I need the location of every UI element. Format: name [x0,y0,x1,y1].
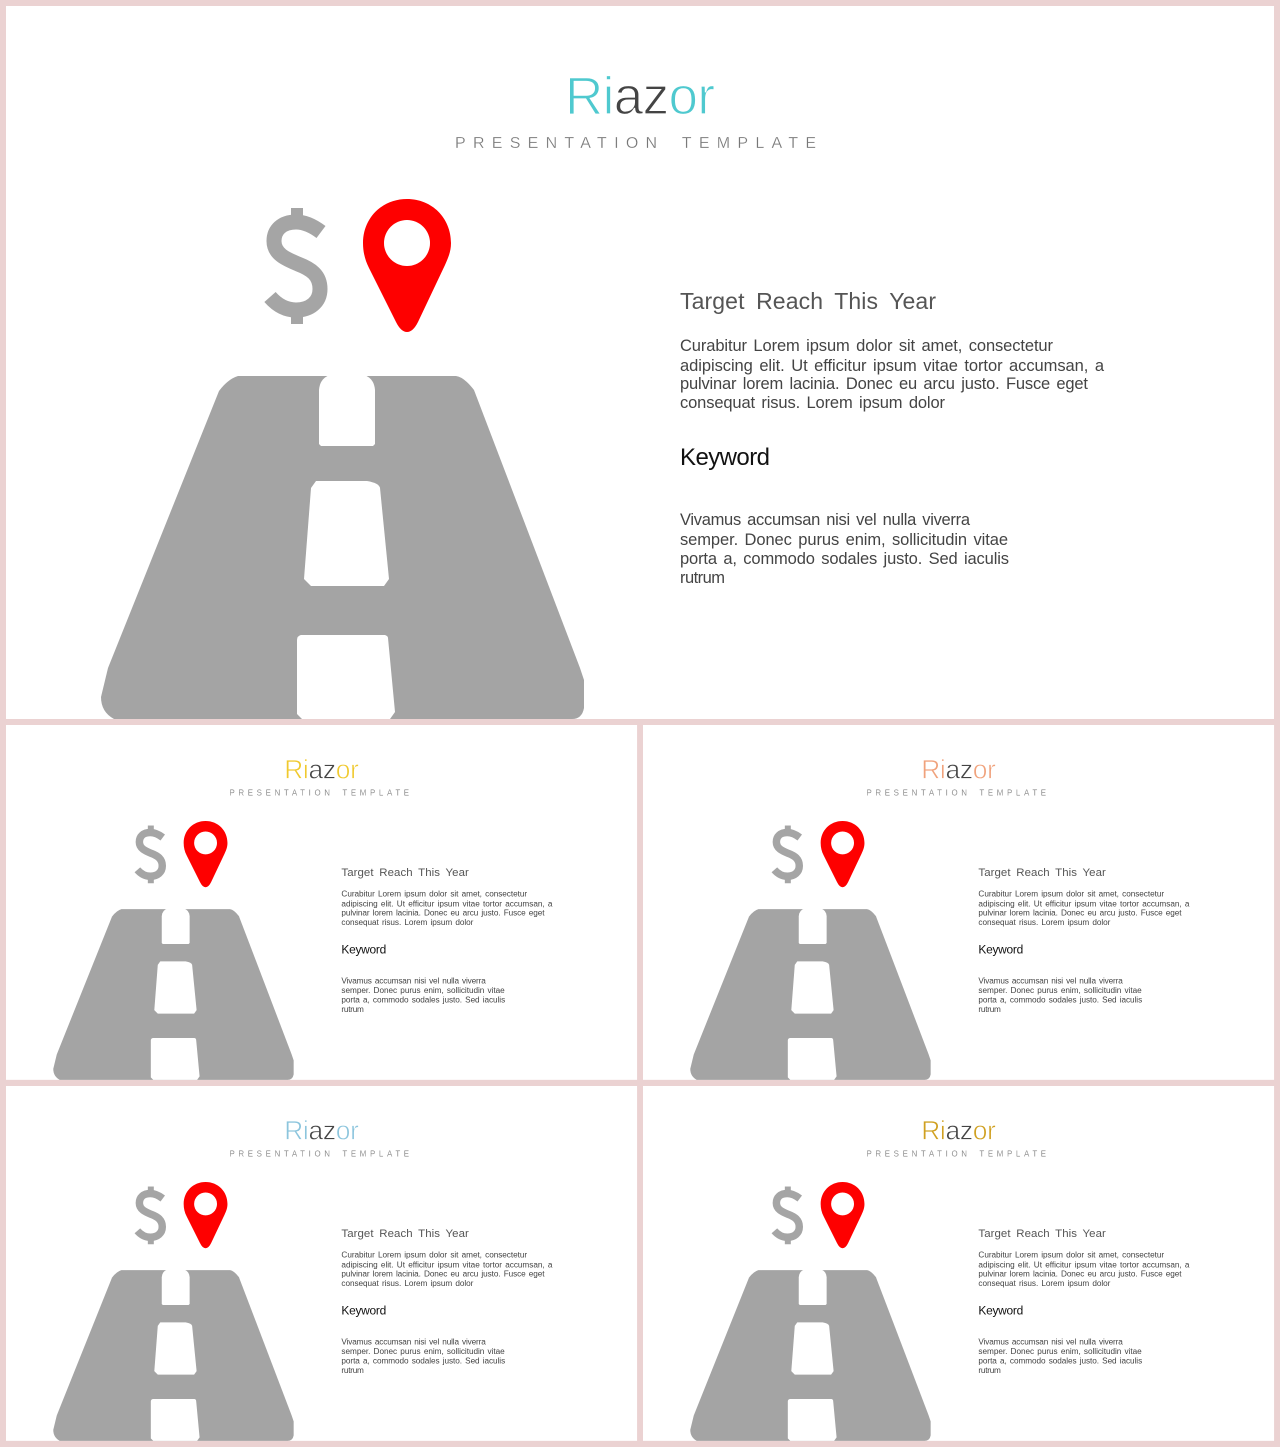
heading: target reach: Target Reach This Year [978,867,1106,879]
heading: keyword: Keyword [341,1303,386,1317]
text block: second paragraph: Vivamus accumsan nisi vel nulla viverra [978,976,1123,985]
text block: second paragraph: Vivamus accumsan nisi vel nulla viverra [978,1337,1123,1346]
text block: second paragraph: semper. Donec purus enim, sollicitudin vitae [978,1347,1142,1356]
subtitle: PRESENTATION TEMPLATE [866,1150,1046,1159]
text block: first paragraph: pulvinar lorem lacinia. Donec eu arcu justo. Fusce eget [978,1270,1182,1279]
icon: map pin [184,1182,227,1248]
text block: first paragraph: pulvinar lorem lacinia. Donec eu arcu justo. Fusce eget [680,375,1088,393]
icon: road [101,375,584,719]
icon: map pin [821,1182,864,1248]
heading: keyword: Keyword [978,1303,1023,1317]
text block: second paragraph: Vivamus accumsan nisi vel nulla viverra [680,511,971,529]
text block: second paragraph: porta a, commodo sodales justo. Sed iaculis [341,996,505,1005]
text block: first paragraph: Curabitur Lorem ipsum dolor sit amet, consectetur [680,337,1054,355]
title: Riazor [921,1116,996,1146]
text block: second paragraph [978,1337,1142,1375]
text block: first paragraph: adipiscing elit. Ut efficitur ipsum vitae tortor accumsan, a [978,900,1190,909]
title: Riazor [921,755,996,785]
subtitle: PRESENTATION TEMPLATE [229,1150,409,1159]
heading: keyword: Keyword [341,942,386,956]
text block: first paragraph: Curabitur Lorem ipsum dolor sit amet, consectetur [341,890,527,899]
subtitle: PRESENTATION TEMPLATE [229,789,409,798]
text block: first paragraph [341,1251,553,1288]
heading: target reach: Target Reach This Year [341,1228,469,1240]
text block: second paragraph: semper. Donec purus enim, sollicitudin vitae [341,986,505,995]
heading: target reach: Target Reach This Year [680,288,936,314]
icon: dollar sign [774,1187,800,1244]
text block: second paragraph [341,1337,505,1375]
text block: first paragraph: Curabitur Lorem ipsum dolor sit amet, consectetur [978,1251,1164,1260]
text block: second paragraph [680,511,1009,587]
text block: first paragraph: consequat risus. Lorem ipsum dolor [680,394,946,412]
text block: second paragraph: porta a, commodo sodales justo. Sed iaculis [978,996,1142,1005]
panel: blue slide [6,1086,637,1441]
text block: first paragraph: adipiscing elit. Ut efficitur ipsum vitae tortor accumsan, a [341,1261,553,1270]
panel: main slide [6,6,1274,719]
title: Riazor [284,755,359,785]
heading: keyword: Keyword [680,444,770,471]
text block: first paragraph: pulvinar lorem lacinia. Donec eu arcu justo. Fusce eget [341,1270,545,1279]
text block: second paragraph: Vivamus accumsan nisi vel nulla viverra [341,976,486,985]
text block: second paragraph: rutrum [978,1366,1001,1375]
title: Riazor [565,67,715,126]
heading: keyword: Keyword [978,942,1023,956]
icon: road [53,1270,294,1441]
title: Riazor [284,1116,359,1146]
text block: first paragraph: Curabitur Lorem ipsum dolor sit amet, consectetur [978,890,1164,899]
icon: dollar sign [137,826,163,883]
text block: second paragraph: rutrum [341,1366,364,1375]
text block: second paragraph: porta a, commodo sodales justo. Sed iaculis [341,1357,505,1366]
panel: orange slide [643,725,1274,1080]
text block: second paragraph: rutrum [341,1005,364,1014]
text block: first paragraph: adipiscing elit. Ut efficitur ipsum vitae tortor accumsan, a [341,900,553,909]
heading: target reach: Target Reach This Year [341,867,469,879]
text block: first paragraph: consequat risus. Lorem ipsum dolor [341,918,474,927]
panel: yellow slide [6,725,637,1080]
icon: dollar sign [137,1187,163,1244]
subtitle: PRESENTATION TEMPLATE [455,135,816,152]
panel: gold slide [643,1086,1274,1441]
text block: first paragraph: adipiscing elit. Ut efficitur ipsum vitae tortor accumsan, a [680,357,1105,375]
text block: second paragraph: porta a, commodo sodales justo. Sed iaculis [680,550,1009,568]
text block: second paragraph [978,976,1142,1014]
icon: map pin [363,199,451,332]
text block: first paragraph: consequat risus. Lorem ipsum dolor [341,1279,474,1288]
text block: first paragraph [341,890,553,927]
text block: first paragraph [978,1251,1190,1288]
text block: first paragraph: pulvinar lorem lacinia. Donec eu arcu justo. Fusce eget [978,909,1182,918]
icon: map pin [184,821,227,887]
text block: second paragraph: semper. Donec purus enim, sollicitudin vitae [680,531,1008,549]
icon: map pin [821,821,864,887]
text block: second paragraph: rutrum [978,1005,1001,1014]
text block: first paragraph: consequat risus. Lorem ipsum dolor [978,918,1111,927]
icon: road [690,1270,931,1441]
text block: first paragraph: adipiscing elit. Ut efficitur ipsum vitae tortor accumsan, a [978,1261,1190,1270]
icon: dollar sign [774,826,800,883]
text block: first paragraph [978,890,1190,927]
text block: second paragraph: porta a, commodo sodales justo. Sed iaculis [978,1357,1142,1366]
subtitle: PRESENTATION TEMPLATE [866,789,1046,798]
text block: second paragraph: semper. Donec purus enim, sollicitudin vitae [341,1347,505,1356]
text block: second paragraph: Vivamus accumsan nisi vel nulla viverra [341,1337,486,1346]
icon: road [690,909,931,1080]
text block: second paragraph: rutrum [680,569,725,587]
text block: first paragraph: Curabitur Lorem ipsum dolor sit amet, consectetur [341,1251,527,1260]
icon: dollar sign [270,208,321,324]
text block: first paragraph: consequat risus. Lorem ipsum dolor [978,1279,1111,1288]
icon: road [53,909,294,1080]
text block: second paragraph: semper. Donec purus enim, sollicitudin vitae [978,986,1142,995]
text block: second paragraph [341,976,505,1014]
heading: target reach: Target Reach This Year [978,1228,1106,1240]
text block: first paragraph [680,337,1105,412]
text block: first paragraph: pulvinar lorem lacinia. Donec eu arcu justo. Fusce eget [341,909,545,918]
